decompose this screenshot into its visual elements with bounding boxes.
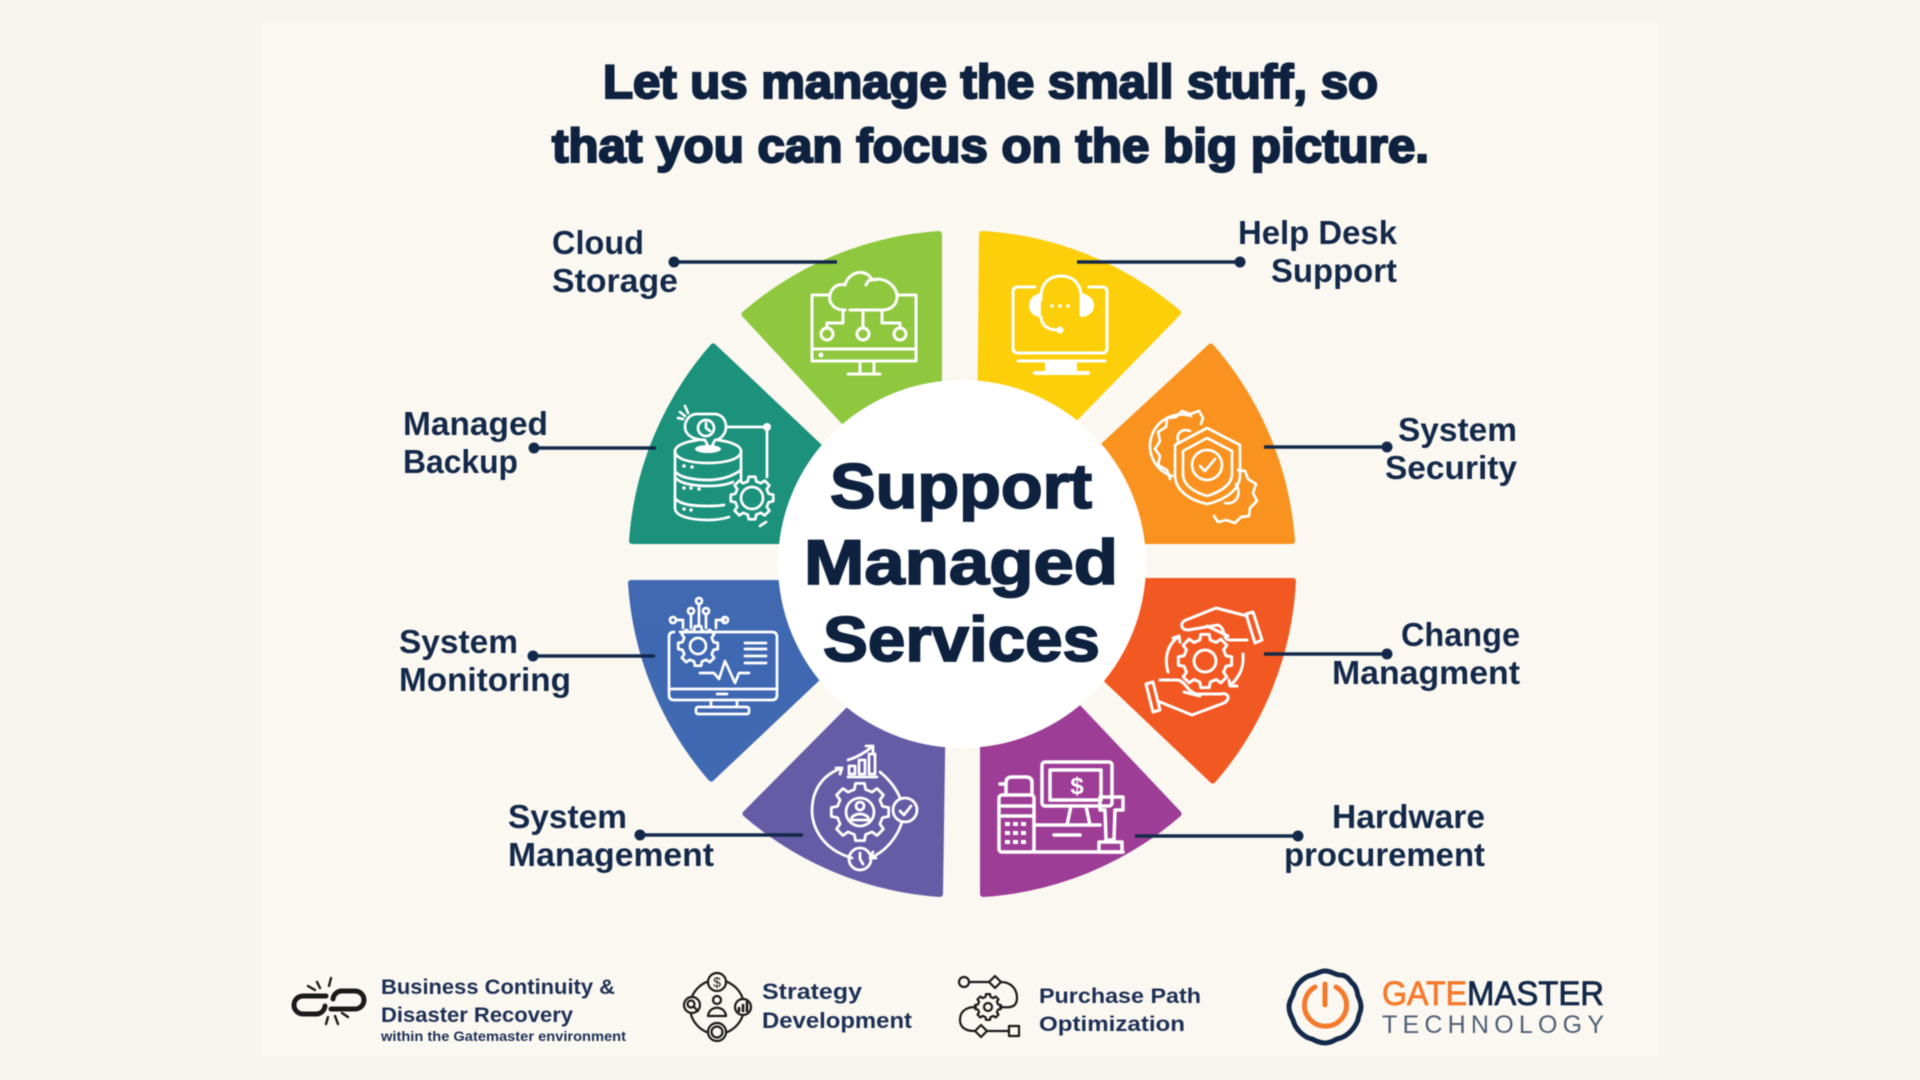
center heading: Support bbox=[830, 452, 1092, 522]
text: Purchase Path Optimization bbox=[1039, 984, 1201, 1036]
segment: system security bbox=[1080, 346, 1292, 541]
label: System Security: Security bbox=[1385, 449, 1518, 486]
connector: change management bbox=[1264, 648, 1392, 660]
segment: change management bbox=[1080, 581, 1293, 781]
label: Help Desk Support: Help Desk bbox=[1238, 214, 1398, 251]
label: Managed Backup: Managed bbox=[403, 405, 548, 442]
segment: hardware procurement bbox=[983, 685, 1179, 894]
label: System Monitoring: System bbox=[399, 623, 518, 660]
icon: point of sale hardware bbox=[999, 762, 1123, 852]
icon: database backup bbox=[675, 406, 773, 526]
label: Managed Backup: Backup bbox=[403, 443, 518, 480]
wordmark: TECHNOLOGY bbox=[1382, 1011, 1604, 1039]
connector: system security bbox=[1264, 442, 1392, 452]
center heading bbox=[804, 452, 1118, 675]
label: Cloud Storage: Cloud bbox=[552, 224, 644, 261]
text: Purchase Path Optimization: Purchase Path bbox=[1039, 984, 1201, 1008]
label: Change Managment bbox=[1332, 616, 1520, 691]
label: Cloud Storage: Storage bbox=[552, 262, 678, 299]
label: System Management: Management bbox=[508, 836, 714, 873]
connector: managed backup bbox=[528, 442, 656, 454]
title: Let us manage the small stuff, so bbox=[603, 55, 1378, 108]
text: Purchase Path Optimization: Optimization bbox=[1039, 1012, 1185, 1036]
label: Managed Backup bbox=[403, 405, 548, 480]
background panel bbox=[261, 23, 1659, 1056]
connector: help desk bbox=[1077, 256, 1246, 268]
text: Strategy Development: Strategy bbox=[762, 979, 863, 1004]
label: Hardware procurement: procurement bbox=[1284, 836, 1485, 873]
label: System Security: System bbox=[1398, 411, 1517, 448]
connector: cloud storage bbox=[668, 256, 837, 268]
text: Business Continuity & Disaster Recovery: Disaster Recovery bbox=[381, 1003, 573, 1027]
icon: cloud network monitor bbox=[812, 272, 916, 374]
connector: hardware procurement bbox=[1135, 830, 1304, 842]
text: Business Continuity & Disaster Recovery bbox=[380, 975, 627, 1044]
label: System Management bbox=[508, 798, 714, 873]
label: System Monitoring bbox=[399, 623, 571, 698]
text: Strategy Development bbox=[762, 979, 913, 1033]
label: System Monitoring: Monitoring bbox=[399, 661, 571, 698]
segment: help desk bbox=[980, 234, 1178, 455]
icon: broken chain bbox=[294, 978, 364, 1024]
panel: wheel segments bbox=[631, 234, 1293, 894]
label: Help Desk Support bbox=[1238, 214, 1398, 289]
label: Help Desk Support: Support bbox=[1271, 252, 1397, 289]
label: Cloud Storage bbox=[552, 224, 678, 299]
icon: strategy bbox=[684, 973, 751, 1041]
label: Change Managment: Change bbox=[1401, 616, 1520, 653]
icon: point of sale hardware: $ bbox=[1070, 773, 1084, 800]
label: Hardware procurement bbox=[1284, 798, 1485, 873]
label: Change Managment: Managment bbox=[1332, 654, 1520, 691]
icon: system monitoring bbox=[669, 598, 777, 714]
center circle bbox=[778, 380, 1146, 748]
label: Hardware procurement: Hardware bbox=[1332, 798, 1485, 835]
segment: cloud storage bbox=[744, 234, 939, 455]
icon: security shield and gears bbox=[1150, 411, 1257, 523]
segment: system management bbox=[746, 687, 943, 894]
center heading: Managed bbox=[804, 528, 1118, 598]
segment: system monitoring bbox=[631, 583, 850, 779]
icon: change management hands and gear bbox=[1146, 608, 1262, 715]
text: Business Continuity & Disaster Recovery: within the Gatemaster environment bbox=[380, 1029, 627, 1044]
icon: help desk headset monitor bbox=[1013, 276, 1107, 373]
connector: system management bbox=[634, 830, 803, 840]
label: System Security bbox=[1385, 411, 1518, 486]
segment: managed backup bbox=[632, 346, 850, 541]
connector lines bbox=[528, 256, 1392, 842]
wordmark: GATE bbox=[1382, 975, 1467, 1013]
text: Strategy Development: Development bbox=[762, 1008, 913, 1033]
icon: purchase path bbox=[959, 976, 1019, 1037]
center heading: Services bbox=[823, 605, 1100, 675]
logo: Gatemaster Technology bbox=[1289, 971, 1604, 1043]
text: Business Continuity & Disaster Recovery: Business Continuity & bbox=[381, 975, 615, 999]
icon: system management gear cycle bbox=[812, 746, 917, 870]
connector: system monitoring bbox=[528, 650, 655, 662]
wordmark bbox=[1382, 975, 1604, 1039]
icon: strategy: $ bbox=[713, 974, 721, 990]
title bbox=[552, 55, 1429, 172]
label: System Management: System bbox=[508, 798, 627, 835]
wordmark: MASTER bbox=[1467, 975, 1604, 1013]
title: that you can focus on the big picture. bbox=[552, 119, 1429, 172]
logo mark bbox=[1289, 971, 1361, 1043]
